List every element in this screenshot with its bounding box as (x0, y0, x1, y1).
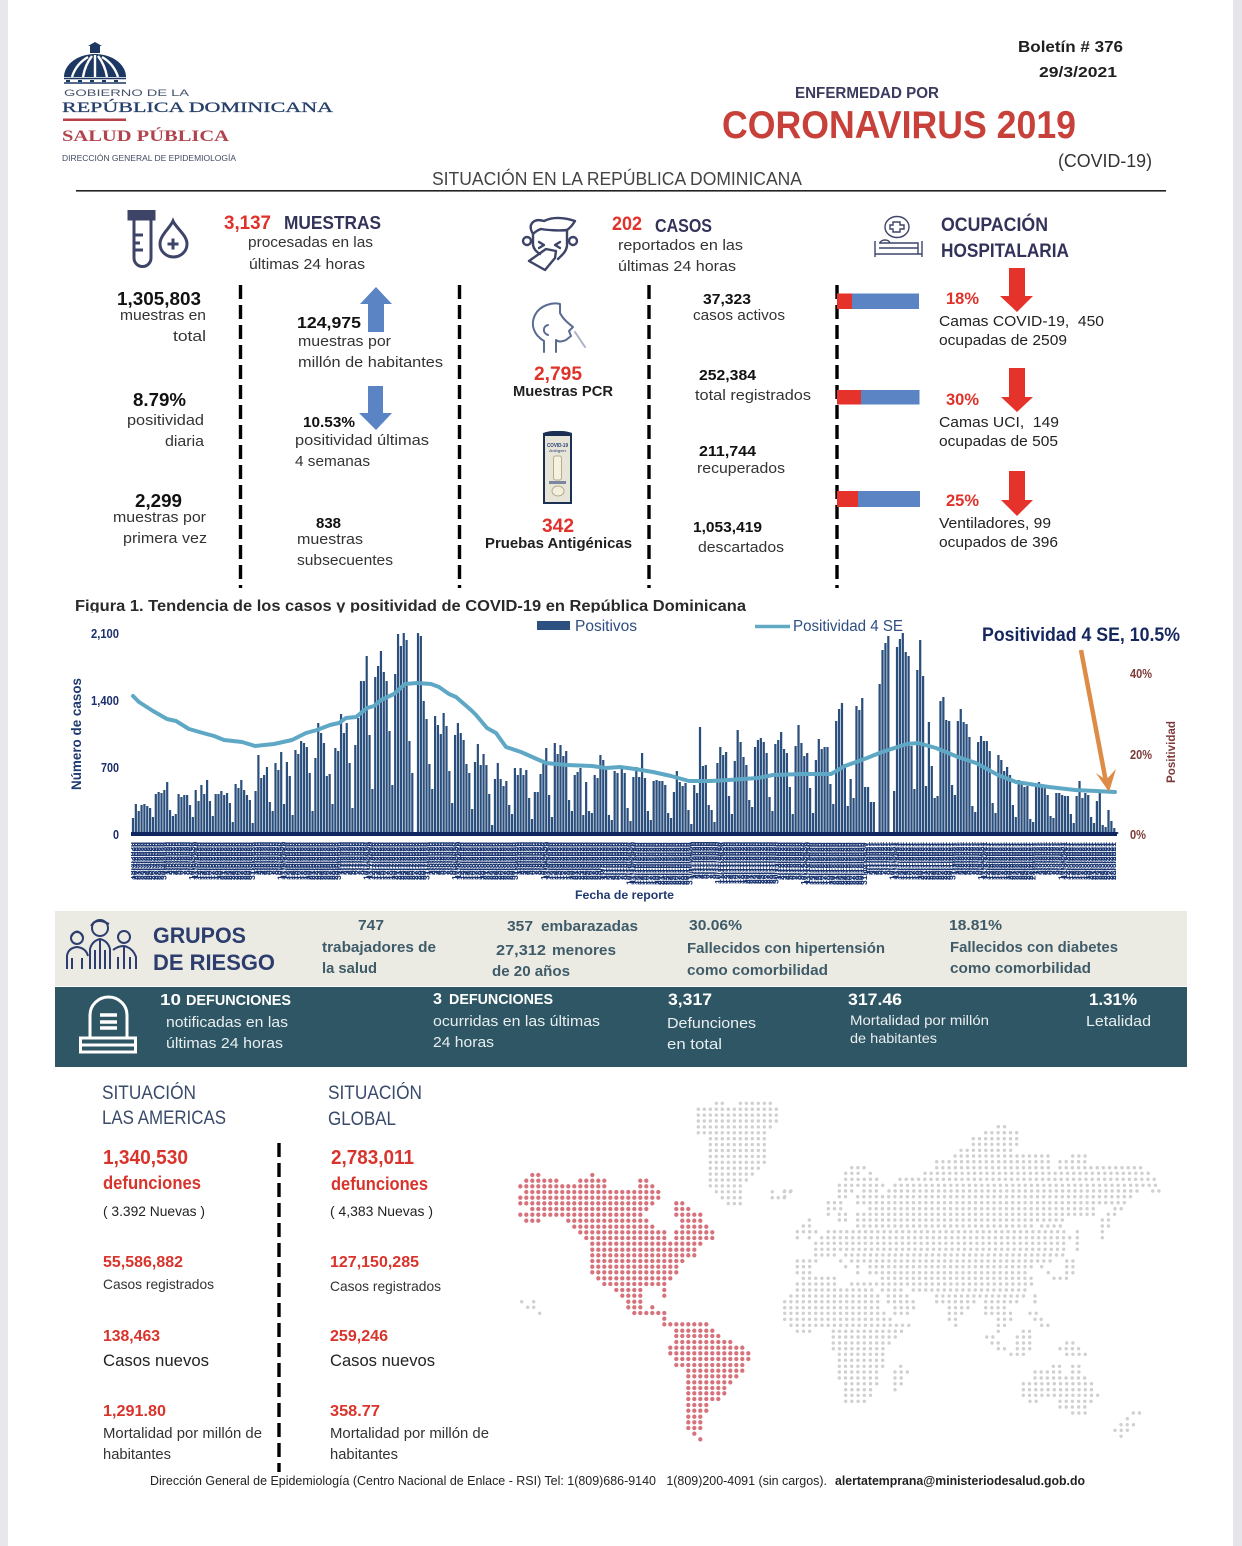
map: Americas highlighted (520, 1175, 748, 1439)
stat: letalidad (1086, 990, 1151, 1030)
stat: mortalidad americas: Mortalidad por millón de (103, 1426, 262, 1442)
left axis labels: 2,100 (91, 626, 119, 641)
legend (537, 618, 903, 635)
stat: fallecidos con hipertension: Fallecidos con hipertensión (687, 940, 885, 957)
stat: defunciones global: ( 4,383 Nuevas ) (330, 1203, 433, 1219)
stat: defunciones global (330, 1147, 433, 1219)
right axis labels: 20% (1130, 747, 1152, 762)
stat: positividad ultimas 4 semanas: positividad últimas (295, 432, 429, 449)
logo: Gobierno de la República Dominicana, Salud Pública: SALUD PÚBLICA (62, 126, 230, 145)
band: defunciones (55, 987, 1187, 1067)
stat: 10 defunciones notificadas: notificadas en las (166, 1014, 288, 1031)
heading: ocupacion hospitalaria: OCUPACIÓN (941, 214, 1048, 236)
stat: mortalidad americas (103, 1403, 262, 1463)
stat: casos nuevos americas: 138,463 (103, 1328, 160, 1345)
stat: casos activos (693, 292, 785, 324)
stat: casos registrados americas: 55,586,882 (103, 1254, 183, 1271)
stat: 3 defunciones ocurridas: DEFUNCIONES (449, 991, 553, 1008)
heading: global: GLOBAL (328, 1109, 396, 1130)
stat: casos registrados global (330, 1254, 441, 1294)
stat: defunciones global: defunciones (331, 1174, 428, 1194)
footer: alertatemprana@ministeriodesalud.gob.do (835, 1473, 1085, 1488)
stat: fallecidos con hipertension: como comorbilidad (687, 962, 828, 979)
stat: casos nuevos global: 259,246 (330, 1328, 388, 1345)
heading: ocupacion hospitalaria (941, 214, 1069, 262)
heading: grupos de riesgo: GRUPOS (153, 923, 246, 948)
heading: grupos de riesgo: DE RIESGO (153, 950, 275, 975)
stat: mortalidad por millon: de habitantes (850, 1030, 937, 1046)
stat: 3 defunciones ocurridas: ocurridas en las últimas (433, 1013, 600, 1030)
chart: casos y positividad (60, 598, 1180, 902)
stat: muestras por millon: millón de habitantes (298, 354, 443, 371)
title: CORONAVIRUS 2019 (722, 104, 1076, 147)
stat: total registrados: 252,384 (699, 368, 756, 384)
title: ENFERMEDAD POR (795, 85, 939, 102)
stat: muestras en total: 1,305,803 (117, 289, 201, 309)
icon: PCR swab head (533, 303, 585, 352)
header: bulletin number and date: Boletín # 376 (1018, 39, 1123, 56)
stat: embarazadas y menores: 357 (507, 918, 533, 935)
stat: muestras PCR: Muestras PCR (513, 383, 613, 400)
panel: casos (485, 214, 811, 556)
stat: muestras por millon (297, 315, 443, 371)
arrow: down red (1000, 268, 1033, 312)
stat: 10 defunciones notificadas: últimas 24 horas (166, 1035, 283, 1052)
stat: positividad ultimas 4 semanas (295, 415, 429, 470)
stat: embarazadas y menores: menores (552, 942, 616, 959)
title (722, 85, 1152, 171)
stat: positividad diaria: diaria (165, 433, 205, 450)
panel: ocupacion hospitalaria (837, 214, 1104, 551)
panel: situacion las americas (102, 1082, 262, 1463)
stat: recuperados: recuperados (697, 460, 785, 477)
heading: casos: CASOS (655, 216, 712, 236)
dotted world map (520, 1103, 1159, 1439)
logo: Gobierno de la República Dominicana, Salud Pública (62, 42, 333, 163)
stat: muestras en total: total (173, 328, 206, 345)
stat: 3 defunciones ocurridas (433, 991, 600, 1051)
right axis labels: Positividad (1166, 721, 1178, 783)
stat: embarazadas y menores: de 20 años (492, 963, 570, 980)
bar: camas covid 18% (837, 294, 919, 309)
stat: total registrados: total registrados (695, 387, 811, 404)
stat: fallecidos con diabetes (949, 917, 1118, 977)
stat: defunciones americas: ( 3.392 Nuevas ) (103, 1203, 205, 1219)
stat: casos nuevos americas: Casos nuevos (103, 1351, 209, 1370)
stat: 3 defunciones ocurridas: 3 (433, 991, 442, 1008)
stat: 10 defunciones notificadas: DEFUNCIONES (186, 992, 291, 1009)
left axis labels: Número de casos (69, 678, 84, 790)
icon: antigen test cassette: Antigen (549, 448, 566, 453)
stat: muestras subsecuentes: 838 (316, 516, 341, 532)
stat: casos registrados americas: Casos registrados (103, 1276, 214, 1292)
right axis labels: 0% (1130, 827, 1146, 842)
stat: 10 defunciones notificadas (160, 992, 291, 1052)
stat: trabajadores de la salud: la salud (322, 960, 377, 977)
bar: ventiladores 25% (837, 491, 920, 507)
stat: embarazadas y menores (492, 918, 638, 980)
stat: defunciones americas: 1,340,530 (103, 1147, 188, 1169)
legend: Positividad 4 SE (793, 618, 903, 635)
stat: recuperados (697, 444, 785, 477)
stat: ventiladores: 25% (946, 491, 979, 510)
stat: trabajadores de la salud (322, 917, 436, 977)
stat: muestras por primera vez: primera vez (123, 530, 207, 547)
stat: mortalidad por millon (848, 990, 989, 1046)
stat: mortalidad global: habitantes (330, 1447, 398, 1463)
heading: las americas: LAS AMERICAS (102, 1108, 226, 1129)
logo: Gobierno de la República Dominicana, Salud Pública: REPÚBLICA DOMINICANA (62, 99, 333, 116)
stat: mortalidad global: 358.77 (330, 1403, 380, 1420)
stat: ventiladores (939, 491, 1058, 551)
stat: camas covid (939, 289, 1104, 349)
icon: sneezing face (523, 218, 577, 270)
stat: muestras por primera vez: muestras por (113, 509, 206, 526)
stat: mortalidad por millon: 317.46 (848, 990, 902, 1009)
callout: positividad 4 SE 10.5%: Positividad 4 SE, 10.5% (982, 625, 1180, 646)
stat: muestras por millon: 124,975 (297, 315, 361, 332)
stat: muestras por primera vez: 2,299 (135, 491, 182, 511)
right axis labels: 40% (1130, 666, 1152, 681)
left axis labels: 0 (113, 827, 119, 842)
stat: muestras PCR: 2,795 (534, 364, 582, 385)
stat: casos activos: 37,323 (703, 292, 751, 308)
stat: camas UCI: ocupadas de 505 (939, 433, 1058, 450)
heading: casos (612, 214, 743, 275)
stat: defunciones americas (103, 1147, 205, 1219)
header: bulletin number and date (1018, 39, 1123, 81)
stat: 10 defunciones notificadas: 10 (160, 992, 181, 1009)
stat: descartados (693, 520, 784, 556)
map: Europe, Asia, Africa, Oceania (785, 1127, 1159, 1436)
stat: trabajadores de la salud: trabajadores de (322, 939, 436, 956)
stat: positividad ultimas 4 semanas: 4 semanas (295, 453, 370, 470)
stat: muestras en total (117, 289, 206, 345)
stat: defunciones en total (667, 990, 756, 1053)
stat: casos registrados americas (103, 1254, 214, 1292)
stat: defunciones americas: defunciones (103, 1173, 201, 1193)
stat: fallecidos con hipertension (687, 917, 885, 979)
stat: 3 defunciones ocurridas: 24 horas (433, 1034, 494, 1051)
stat: camas covid: ocupadas de 2509 (939, 332, 1067, 349)
icon: hospital bed (875, 216, 922, 257)
stat: casos registrados global: Casos registrados (330, 1278, 441, 1294)
icon: tombstone (80, 997, 136, 1052)
left axis labels (69, 626, 119, 842)
stat: mortalidad americas: habitantes (103, 1447, 171, 1463)
stat: pruebas antigenicas (485, 516, 632, 552)
stat: muestras por millon: muestras por (298, 333, 391, 350)
heading: muestras: 3,137 (224, 213, 271, 234)
logo: Gobierno de la República Dominicana, Salud Pública: GOBIERNO DE LA (64, 88, 190, 99)
stat: casos nuevos global (330, 1328, 435, 1370)
icon: dome (64, 42, 126, 83)
stat: embarazadas y menores: 27,312 (496, 942, 546, 959)
stat: casos nuevos americas (103, 1328, 209, 1370)
stat: camas UCI: Camas UCI, 149 (939, 414, 1059, 431)
stat: fallecidos con diabetes: Fallecidos con diabetes (950, 939, 1118, 956)
stat: positividad diaria (127, 390, 205, 450)
stat: muestras subsecuentes: subsecuentes (297, 552, 393, 569)
stat: muestras por primera vez (113, 491, 207, 547)
x axis date labels: 19/4/2020 20/4/2020 21/4/2020 22/4/2020 23/4/2020 24/4/2020 25/4/2020 26/4/2020 27/4/2020 28/4/2020 29/4/2020 30/4/2020 1/5/2020 2/5/2020 3/5/2020 4/5/2020 5/5/2020 6/5/2020 7/5/2020 8/5/2020 9/5/2020 10/5/2020 11/5/2020 12/5/2020 13/5/2020 14/5/2020 15/5/2020 16/5/2020 17/5/2020 18/5/2020 19/5/2020 20/5/2020 21/5/2020 22/5/2020 23/5/2020 24/5/2020 25/5/2020 26/5/2020 27/5/2020 28/5/2020 29/5/2020 30/5/2020 31/5/2020 1/6/2020 2/6/2020 3/6/2020 4/6/2020 5/6/2020 6/6/2020 7/6/2020 8/6/2020 9/6/2020 10/6/2020 11/6/2020 12/6/2020 13/6/2020 14/6/2020 15/6/2020 16/6/2020 17/6/2020 18/6/2020 19/6/2020 20/6/2020 21/6/2020 22/6/2020 23/6/2020 24/6/2020 25/6/2020 26/6/2020 27/6/2020 28/6/2020 29/6/2020 30/6/2020 1/7/2020 2/7/2020 3/7/2020 4/7/2020 5/7/2020 6/7/2020 7/7/2020 8/7/2020 9/7/2020 10/7/2020 11/7/2020 12/7/2020 13/7/2020 14/7/2020 15/7/2020 16/7/2020 17/7/2020 18/7/2020 19/7/2020 20/7/2020 21/7/2020 22/7/2020 23/7/2020 24/7/2020 25/7/2020 26/7/2020 27/7/2020 28/7/2020 29/7/2020 30/7/2020 31/7/2020 1/8/2020 2/8/2020 3/8/2020 4/8/2020 5/8/2020 6/8/2020 7/8/2020 8/8/2020 9/8/2020 10/8/2020 11/8/2020 12/8/2020 13/8/2020 14/8/2020 15/8/2020 16/8/2020 17/8/2020 18/8/2020 19/8/2020 20/8/2020 21/8/2020 22/8/2020 23/8/2020 24/8/2020 25/8/2020 26/8/2020 27/8/2020 28/8/2020 29/8/2020 30/8/2020 31/8/2020 1/9/2020 2/9/2020 3/9/2020 4/9/2020 5/9/2020 6/9/2020 7/9/2020 8/9/2020 9/9/2020 10/9/2020 11/9/2020 12/9/2020 13/9/2020 14/9/2020 15/9/2020 16/9/2020 17/9/2020 18/9/2020 19/9/2020 20/9/2020 21/9/2020 22/9/2020 23/9/2020 24/9/2020 25/9/2020 26/9/2020 27/9/2020 28/9/2020 29/9/2020 30/9/2020 1/10/2020 2/10/2020 3/10/2020 4/10/2020 5/10/2020 6/10/2020 7/10/2020 8/10/2020 9/10/2020 10/10/2020 11/10/2020 12/10/2020 13/10/2020 14/10/2020 15/10/2020 16/10/2020 17/10/2020 18/10/2020 19/10/2020 20/10/2020 21/10/2020 22/10/2020 23/10/2020 24/10/2020 25/10/2020 26/10/2020 27/10/2020 28/10/2020 29/10/2020 30/10/2020 31/10/2020 1/11/2020 2/11/2020 3/11/2020 4/11/2020 5/11/2020 6/11/2020 7/11/2020 8/11/2020 9/11/2020 10/11/2020 11/11/2020 12/11/2020 13/11/2020 14/11/2020 15/11/2020 16/11/2020 17/11/2020 18/11/2020 19/11/2020 20/11/2020 21/11/2020 22/11/2020 23/11/2020 24/11/2020 25/11/2020 26/11/2020 27/11/2020 28/11/2020 29/11/2020 30/11/2020 1/12/2020 2/12/2020 3/12/2020 4/12/2020 5/12/2020 6/12/2020 7/12/2020 8/12/2020 9/12/2020 10/12/2020 11/12/2020 12/12/2020 13/12/2020 14/12/2020 15/12/2020 16/12/2020 17/12/2020 18/12/2020 19/12/2020 20/12/2020 21/12/2020 22/12/2020 23/12/2020 24/12/2020 25/12/2020 26/12/2020 27/12/2020 28/12/2020 29/12/2020 30/12/2020 31/12/2020 1/1/2021 2/1/2021 3/1/2021 4/1/2021 5/1/2021 6/1/2021 7/1/2021 8/1/2021 9/1/2021 10/1/2021 11/1/2021 12/1/2021 13/1/2021 14/1/2021 15/1/2021 16/1/2021 17/1/2021 18/1/2021 19/1/2021 20/1/2021 21/1/2021 22/1/2021 23/1/2021 24/1/2021 25/1/2021 26/1/2021 27/1/2021 28/1/2021 29/1/2021 30/1/2021 31/1/2021 1/2/2021 2/2/2021 3/2/2021 4/2/2021 5/2/2021 6/2/2021 7/2/2021 8/2/2021 9/2/2021 10/2/2021 11/2/2021 12/2/2021 13/2/2021 14/2/2021 15/2/2021 16/2/2021 17/2/2021 18/2/2021 19/2/2021 20/2/2021 21/2/2021 22/2/2021 23/2/2021 24/2/2021 25/2/2021 26/2/2021 27/2/2021 28/2/2021 1/3/2021 2/3/2021 3/3/2021 4/3/2021 5/3/2021 6/3/2021 7/3/2021 8/3/2021 9/3/2021 10/3/2021 11/3/2021 12/3/2021 13/3/2021 14/3/2021 15/3/2021 16/3/2021 17/3/2021 18/3/2021 19/3/2021 20/3/2021 21/3/2021 22/3/2021 23/3/2021 24/3/2021 25/3/2021 26/3/2021 27/3/2021 28/3/2021 29/3/2021 (131, 842, 1116, 885)
stat: defunciones en total: 3,317 (668, 990, 712, 1009)
arrow: orange pointer (1081, 650, 1116, 792)
stat: letalidad: 1.31% (1089, 990, 1137, 1009)
stat: pruebas antigenicas: 342 (542, 516, 574, 537)
title: (COVID-19) (1058, 151, 1152, 171)
stat: ventiladores: ocupados de 396 (939, 534, 1058, 551)
stat: camas covid: Camas COVID-19, 450 (939, 313, 1104, 330)
bar: camas UCI 30% (837, 390, 920, 404)
arrow: down red (1001, 471, 1033, 516)
stat: letalidad: Letalidad (1086, 1013, 1151, 1030)
heading: muestras (224, 213, 381, 273)
legend: Positivos (575, 618, 637, 635)
stat: fallecidos con diabetes: 18.81% (949, 917, 1002, 934)
stat: defunciones global: 2,783,011 (331, 1147, 414, 1169)
stat: casos nuevos global: Casos nuevos (330, 1351, 435, 1370)
footer: Dirección General de Epidemiología (Centro Nacional de Enlace - RSI) Tel: 1(809)686-9140 1(809)200-4091 (sin cargos). (150, 1473, 827, 1488)
stat: recuperados: 211,744 (699, 444, 756, 460)
stat: muestras subsecuentes (297, 516, 393, 569)
x axis title: Fecha de reporte (575, 888, 674, 902)
heading: muestras: procesadas en las (248, 234, 373, 251)
heading: muestras: últimas 24 horas (249, 256, 365, 273)
stat: camas covid: 18% (946, 289, 979, 308)
stat: trabajadores de la salud: 747 (358, 917, 384, 934)
header: bulletin number and date: 29/3/2021 (1039, 64, 1117, 81)
stat: muestras PCR (513, 364, 613, 400)
stat: mortalidad por millon: Mortalidad por millón (850, 1012, 989, 1028)
icon: antigen test cassette: COVID-19 (547, 443, 568, 449)
heading: casos: reportados en las (618, 237, 743, 254)
stat: muestras subsecuentes: muestras (297, 531, 363, 548)
logo: Gobierno de la República Dominicana, Salud Pública: DIRECCIÓN GENERAL DE EPIDEMIOLOGÍA (62, 153, 236, 163)
stat: fallecidos con hipertension: 30.06% (689, 917, 742, 934)
bars: positivos (133, 633, 1117, 834)
stat: camas UCI (939, 390, 1059, 450)
stat: pruebas antigenicas: Pruebas Antigénicas (485, 535, 632, 552)
stat: casos activos: casos activos (693, 307, 785, 324)
stat: muestras en total: muestras en (120, 307, 206, 324)
stat: total registrados (695, 368, 811, 404)
heading: global (328, 1082, 422, 1130)
subtitle: SITUACIÓN EN LA REPÚBLICA DOMINICANA (432, 168, 802, 189)
stat: defunciones en total: Defunciones (667, 1015, 756, 1032)
heading: muestras: MUESTRAS (284, 213, 381, 233)
heading: casos: últimas 24 horas (618, 258, 736, 275)
panel: muestras (113, 212, 443, 569)
stat: fallecidos con diabetes: como comorbilidad (950, 960, 1091, 977)
stat: casos registrados global: 127,150,285 (330, 1254, 419, 1271)
stat: embarazadas y menores: embarazadas (541, 918, 638, 935)
heading: grupos de riesgo (153, 923, 275, 975)
left axis labels: 1,400 (91, 693, 119, 708)
heading: global: SITUACIÓN (328, 1082, 422, 1104)
stat: ventiladores: Ventiladores, 99 (939, 515, 1051, 532)
stat: positividad ultimas 4 semanas: 10.53% (303, 415, 355, 431)
icon: people (67, 920, 136, 969)
heading: casos: 202 (612, 214, 642, 235)
stat: defunciones en total: en total (667, 1036, 722, 1053)
panel: situacion global (328, 1082, 489, 1463)
arrow: down red (1001, 368, 1033, 412)
heading: ocupacion hospitalaria: HOSPITALARIA (941, 241, 1069, 262)
icon: antigen test cassette (543, 431, 572, 504)
stat: mortalidad americas: 1,291.80 (103, 1403, 166, 1420)
line: positividad 4 SE (133, 683, 1115, 792)
stat: mortalidad global: Mortalidad por millón de (330, 1426, 489, 1442)
chart title: Figura 1. Tendencia de los casos y positividad de COVID-19 en República Dominicana (75, 598, 746, 615)
right axis labels (1130, 666, 1178, 842)
arrow: up (360, 287, 392, 332)
stat: camas UCI: 30% (946, 390, 979, 409)
left axis labels: 700 (101, 760, 119, 775)
icon: test tube and drop (129, 212, 187, 266)
arrow: down (359, 386, 392, 430)
stat: positividad diaria: 8.79% (133, 390, 186, 410)
map: Greenland and islands (522, 1103, 790, 1313)
heading: las americas: SITUACIÓN (102, 1082, 196, 1104)
stat: descartados: 1,053,419 (693, 520, 762, 536)
heading: las americas (102, 1082, 226, 1129)
stat: positividad diaria: positividad (127, 412, 204, 429)
stat: mortalidad global (330, 1403, 489, 1463)
band: grupos de riesgo (55, 911, 1187, 986)
stat: descartados: descartados (698, 539, 784, 556)
